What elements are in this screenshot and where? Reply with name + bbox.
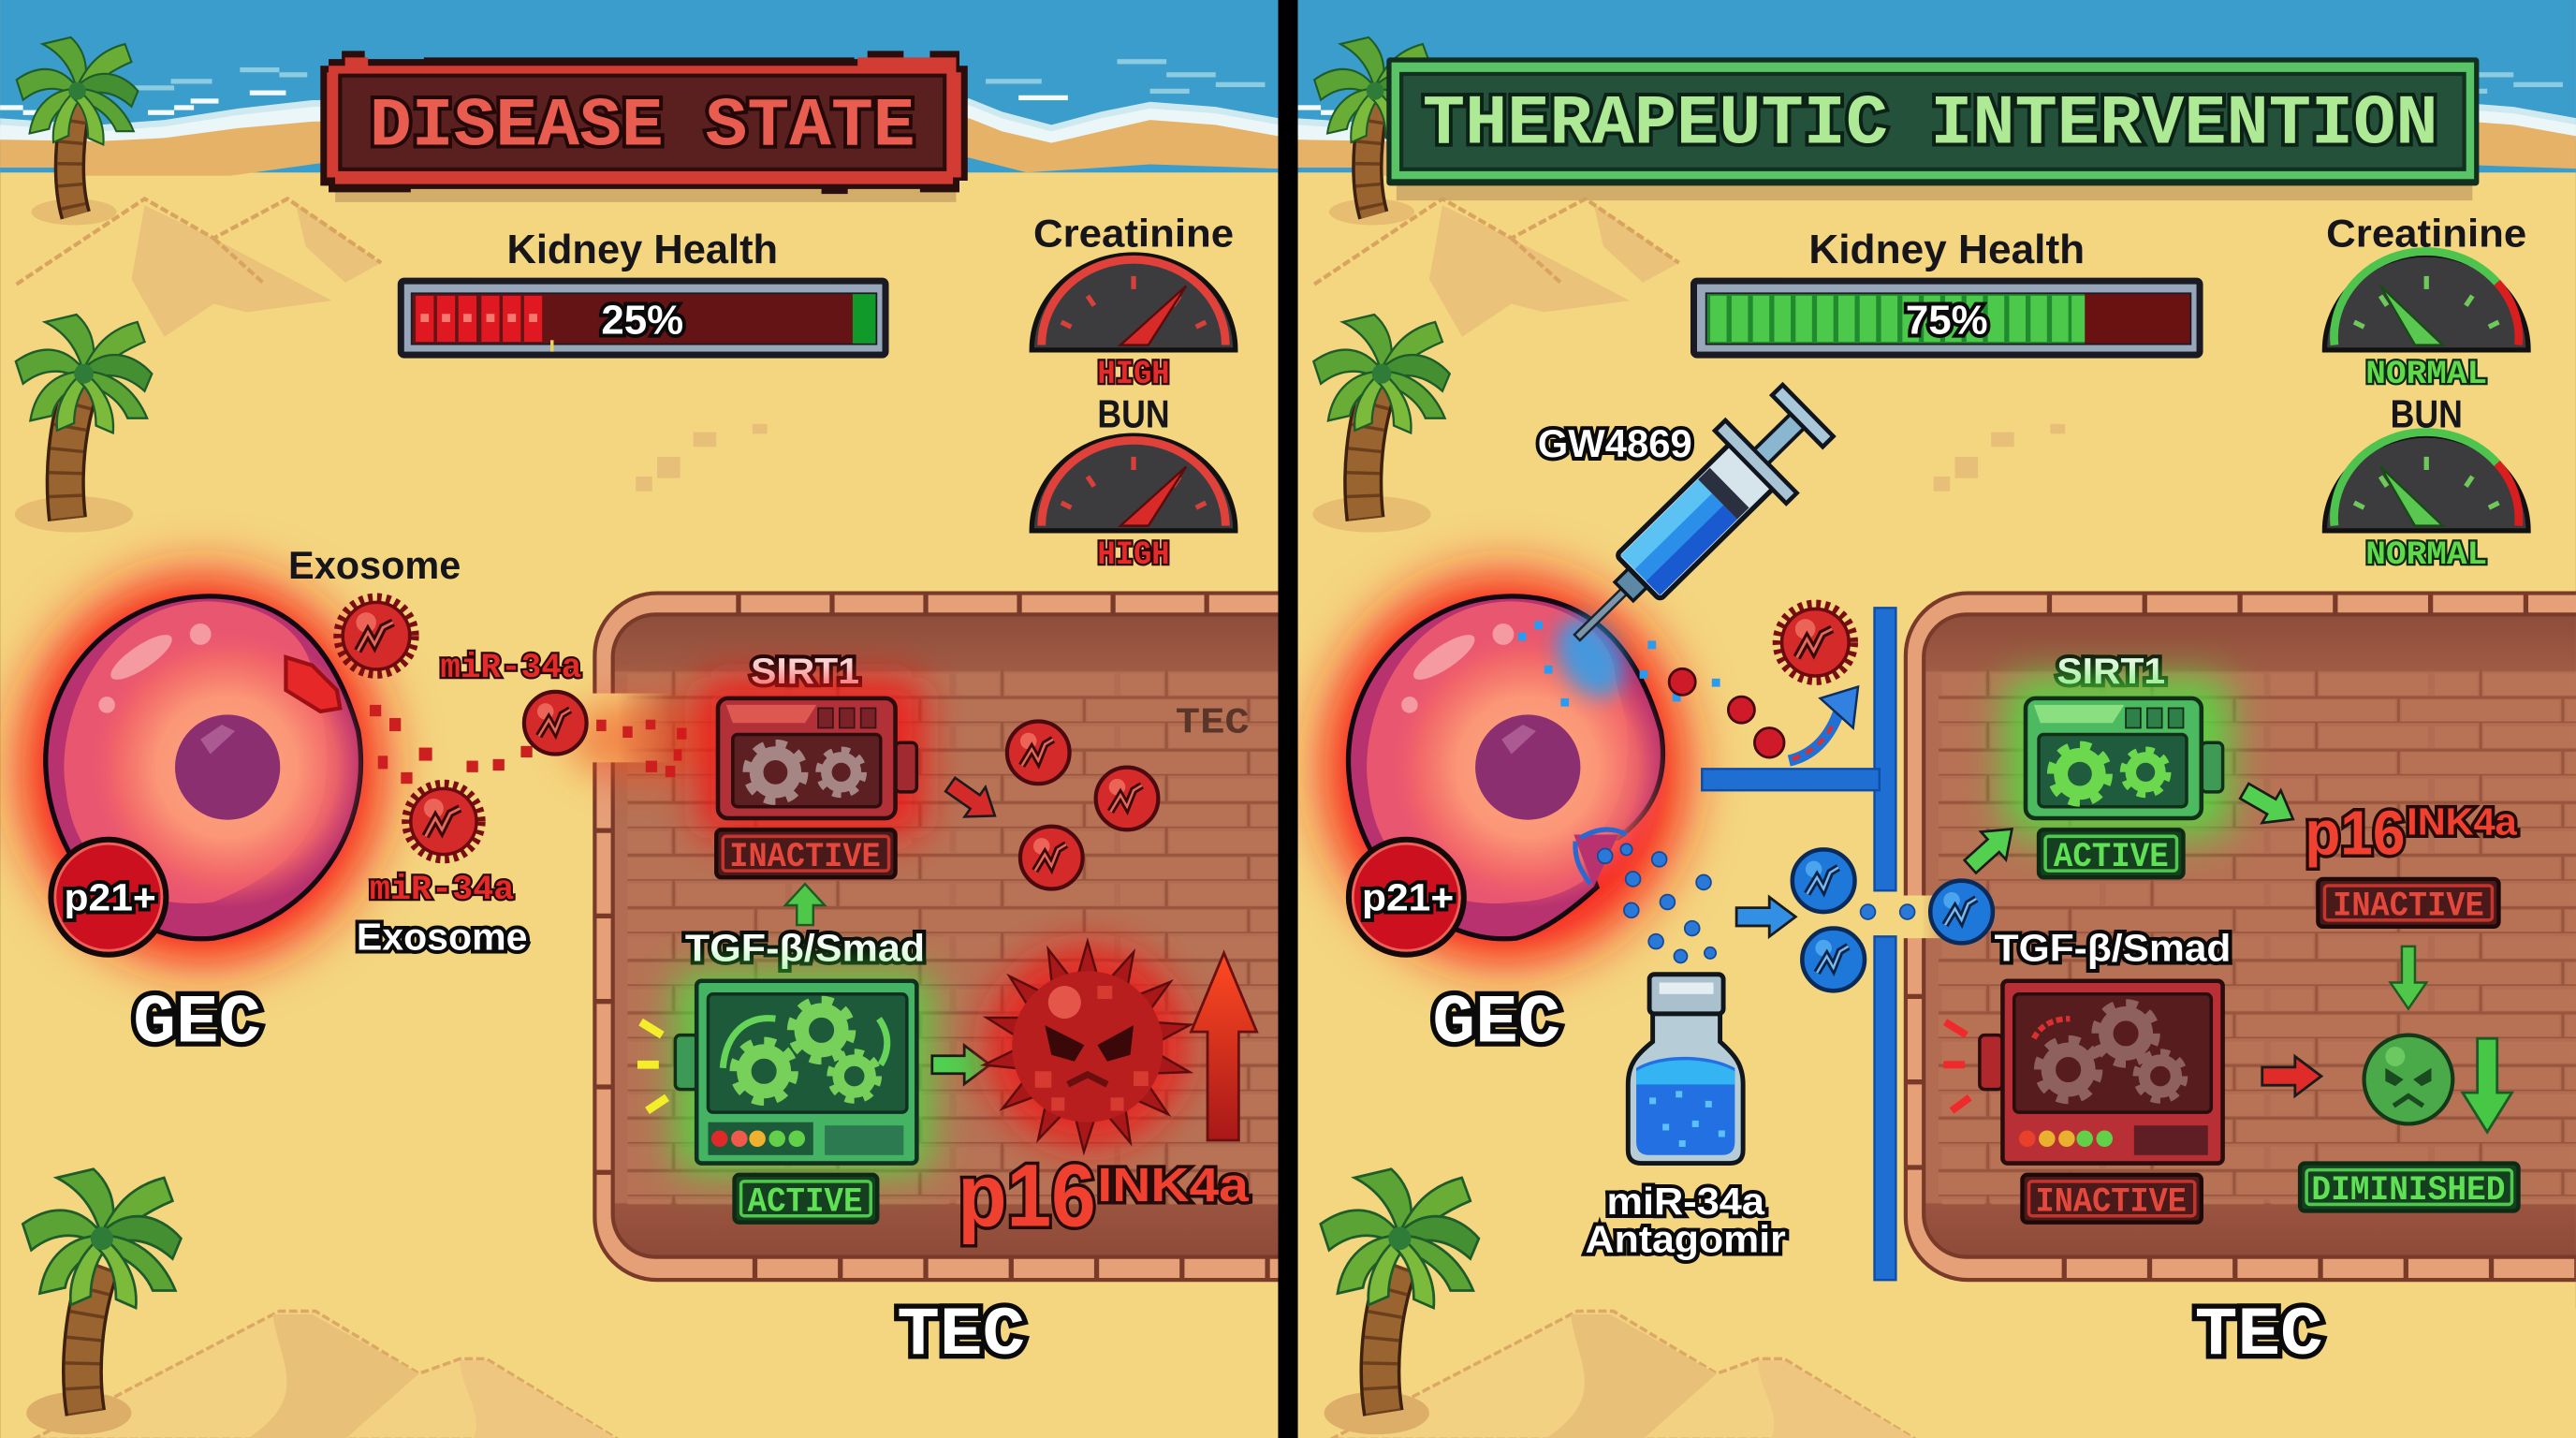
background: beach scene [1298, 0, 2576, 1438]
gauge: BUN normal: BUN [2391, 391, 2463, 435]
gauge: creatinine normal: NORMAL [2365, 356, 2487, 393]
label: TGF-beta/Smad: TGF-β/Smad [685, 927, 925, 970]
label: p16 INK4a high: INK4a [1097, 1158, 1250, 1211]
arrow: SIRT1 to p16 [2235, 775, 2303, 835]
gauge: BUN high: BUN [1097, 391, 1170, 435]
label: GEC: GEC [1432, 986, 1560, 1064]
diminished green particle [2364, 1035, 2452, 1123]
label: miR-34a Antagomir: miR-34a [1606, 1180, 1765, 1223]
label: p16 INK4a low: INK4a [2407, 800, 2517, 844]
label: miR-34a Antagomir [1586, 1180, 1786, 1260]
label: p16 INK4a low [2305, 800, 2517, 869]
label: p16 INK4a high: p16 [958, 1146, 1096, 1245]
gauge: creatinine high [1032, 211, 1236, 393]
label: GEC: GEC [133, 986, 261, 1064]
label: Exosome top: Exosome [288, 543, 461, 587]
TEC tubule wall [593, 592, 1279, 1283]
label: TGF-beta/Smad: TGF-β/Smad [1995, 927, 2231, 970]
arrow: up to SIRT1 [785, 884, 825, 925]
kidney health meter: 75% [1906, 297, 1988, 343]
label: p16 INK4a low: p16 [2305, 800, 2405, 869]
GEC cell with p21+ badge [1325, 575, 1686, 962]
exosome in TEC 3 [1020, 827, 1083, 888]
arrow: green decrease [2463, 1038, 2511, 1132]
antagomir exosome 2 [1802, 929, 1865, 990]
status tag: SIRT1 inactive: INACTIVE [729, 838, 881, 877]
title banner: therapeutic intervention: THERAPEUTIC INTERVENTION [1423, 84, 2438, 165]
label: SIRT1: SIRT1 [2056, 652, 2165, 692]
GEC cell with p21+ badge [22, 575, 383, 962]
exosome in TEC 1 [1007, 721, 1070, 784]
gauge: BUN high: HIGH [1097, 536, 1170, 574]
TGF-beta machine: inactive [1943, 981, 2223, 1164]
antagomir exosome 3 [1930, 881, 1993, 943]
kidney health meter: 25% [601, 297, 683, 343]
GW4869 syringe [1518, 374, 1844, 709]
SIRT1 machine: active [2004, 677, 2231, 838]
status tag: SIRT1 active: ACTIVE [2054, 838, 2169, 877]
gauge: BUN normal [2324, 391, 2528, 574]
arrow: antagomir direction [1736, 897, 1795, 936]
title banner: therapeutic intervention [1386, 57, 2479, 200]
blocked exosome release [1669, 606, 1858, 761]
label: Exosome lower: Exosome [357, 915, 527, 958]
p16 senescent virus-like particle [982, 942, 1193, 1152]
label: TEC: TEC [2195, 1298, 2323, 1375]
arrow: to p16 senescence [932, 1046, 990, 1084]
kidney health meter [1690, 227, 2203, 359]
arrow: down to reduced p16 [2391, 946, 2426, 1009]
gauge: creatinine normal: Creatinine [2326, 211, 2526, 255]
kidney health meter [398, 227, 889, 359]
status tag: TGF-beta active: ACTIVE [748, 1182, 862, 1222]
exosome middle [524, 692, 587, 755]
SIRT1 machine: inactive [698, 677, 925, 838]
status tag: p16 inactive: INACTIVE [2333, 888, 2484, 927]
gauge: creatinine normal [2324, 211, 2528, 393]
TEC tubule wall: TEC [1176, 703, 1250, 744]
label: GW4869: GW4869 [1538, 421, 1692, 465]
status tag: diminished: DIMINISHED [2311, 1171, 2505, 1211]
gauge: creatinine high: Creatinine [1033, 211, 1234, 255]
antagomir exosome 1 [1793, 849, 1854, 912]
label: p16 INK4a high [958, 1146, 1250, 1245]
title banner: disease state [320, 51, 968, 202]
TGF-beta machine: active [637, 969, 933, 1175]
arrow: SIRT1 to miR targets [940, 770, 1005, 830]
label: TEC: TEC [897, 1298, 1025, 1375]
exosome top [340, 599, 413, 673]
GEC cell with p21+ badge: p21+ [65, 875, 156, 918]
arrow: red to p16 [2262, 1056, 2321, 1096]
status tag: TGF-beta inactive: INACTIVE [2036, 1182, 2187, 1222]
label: miR-34a lower: miR-34a [370, 871, 514, 910]
inhibition barrier [1702, 608, 1895, 1280]
divider [1278, 0, 1298, 1438]
gauge: BUN normal: NORMAL [2365, 536, 2487, 574]
antagomir particles [1598, 844, 1915, 962]
title banner: disease state: DISEASE STATE [370, 88, 915, 166]
arrow: red upregulation [1191, 953, 1257, 1140]
GEC cell with p21+ badge: p21+ [1362, 875, 1454, 918]
TEC tubule wall [1899, 594, 2576, 1280]
vial: miR-34a antagomir [1628, 975, 1743, 1164]
label: SIRT1: SIRT1 [751, 652, 859, 692]
exosome in TEC 2 [1096, 768, 1158, 829]
label: miR-34a Antagomir: Antagomir [1586, 1217, 1786, 1260]
label: miR-34a top: miR-34a [440, 649, 581, 688]
panel: therapeutic intervention [1298, 0, 2576, 1438]
exosome lower [407, 785, 480, 858]
gauge: BUN high [1032, 391, 1236, 574]
panel: disease state [0, 0, 1368, 1438]
kidney health meter: Kidney Health [506, 227, 778, 272]
exosome release trail [370, 697, 731, 784]
kidney health meter: Kidney Health [1808, 227, 2085, 272]
arrow: to SIRT1 [1957, 815, 2025, 881]
background: beach scene with palms and dunes [0, 0, 1298, 1438]
gauge: creatinine high: HIGH [1097, 356, 1170, 393]
